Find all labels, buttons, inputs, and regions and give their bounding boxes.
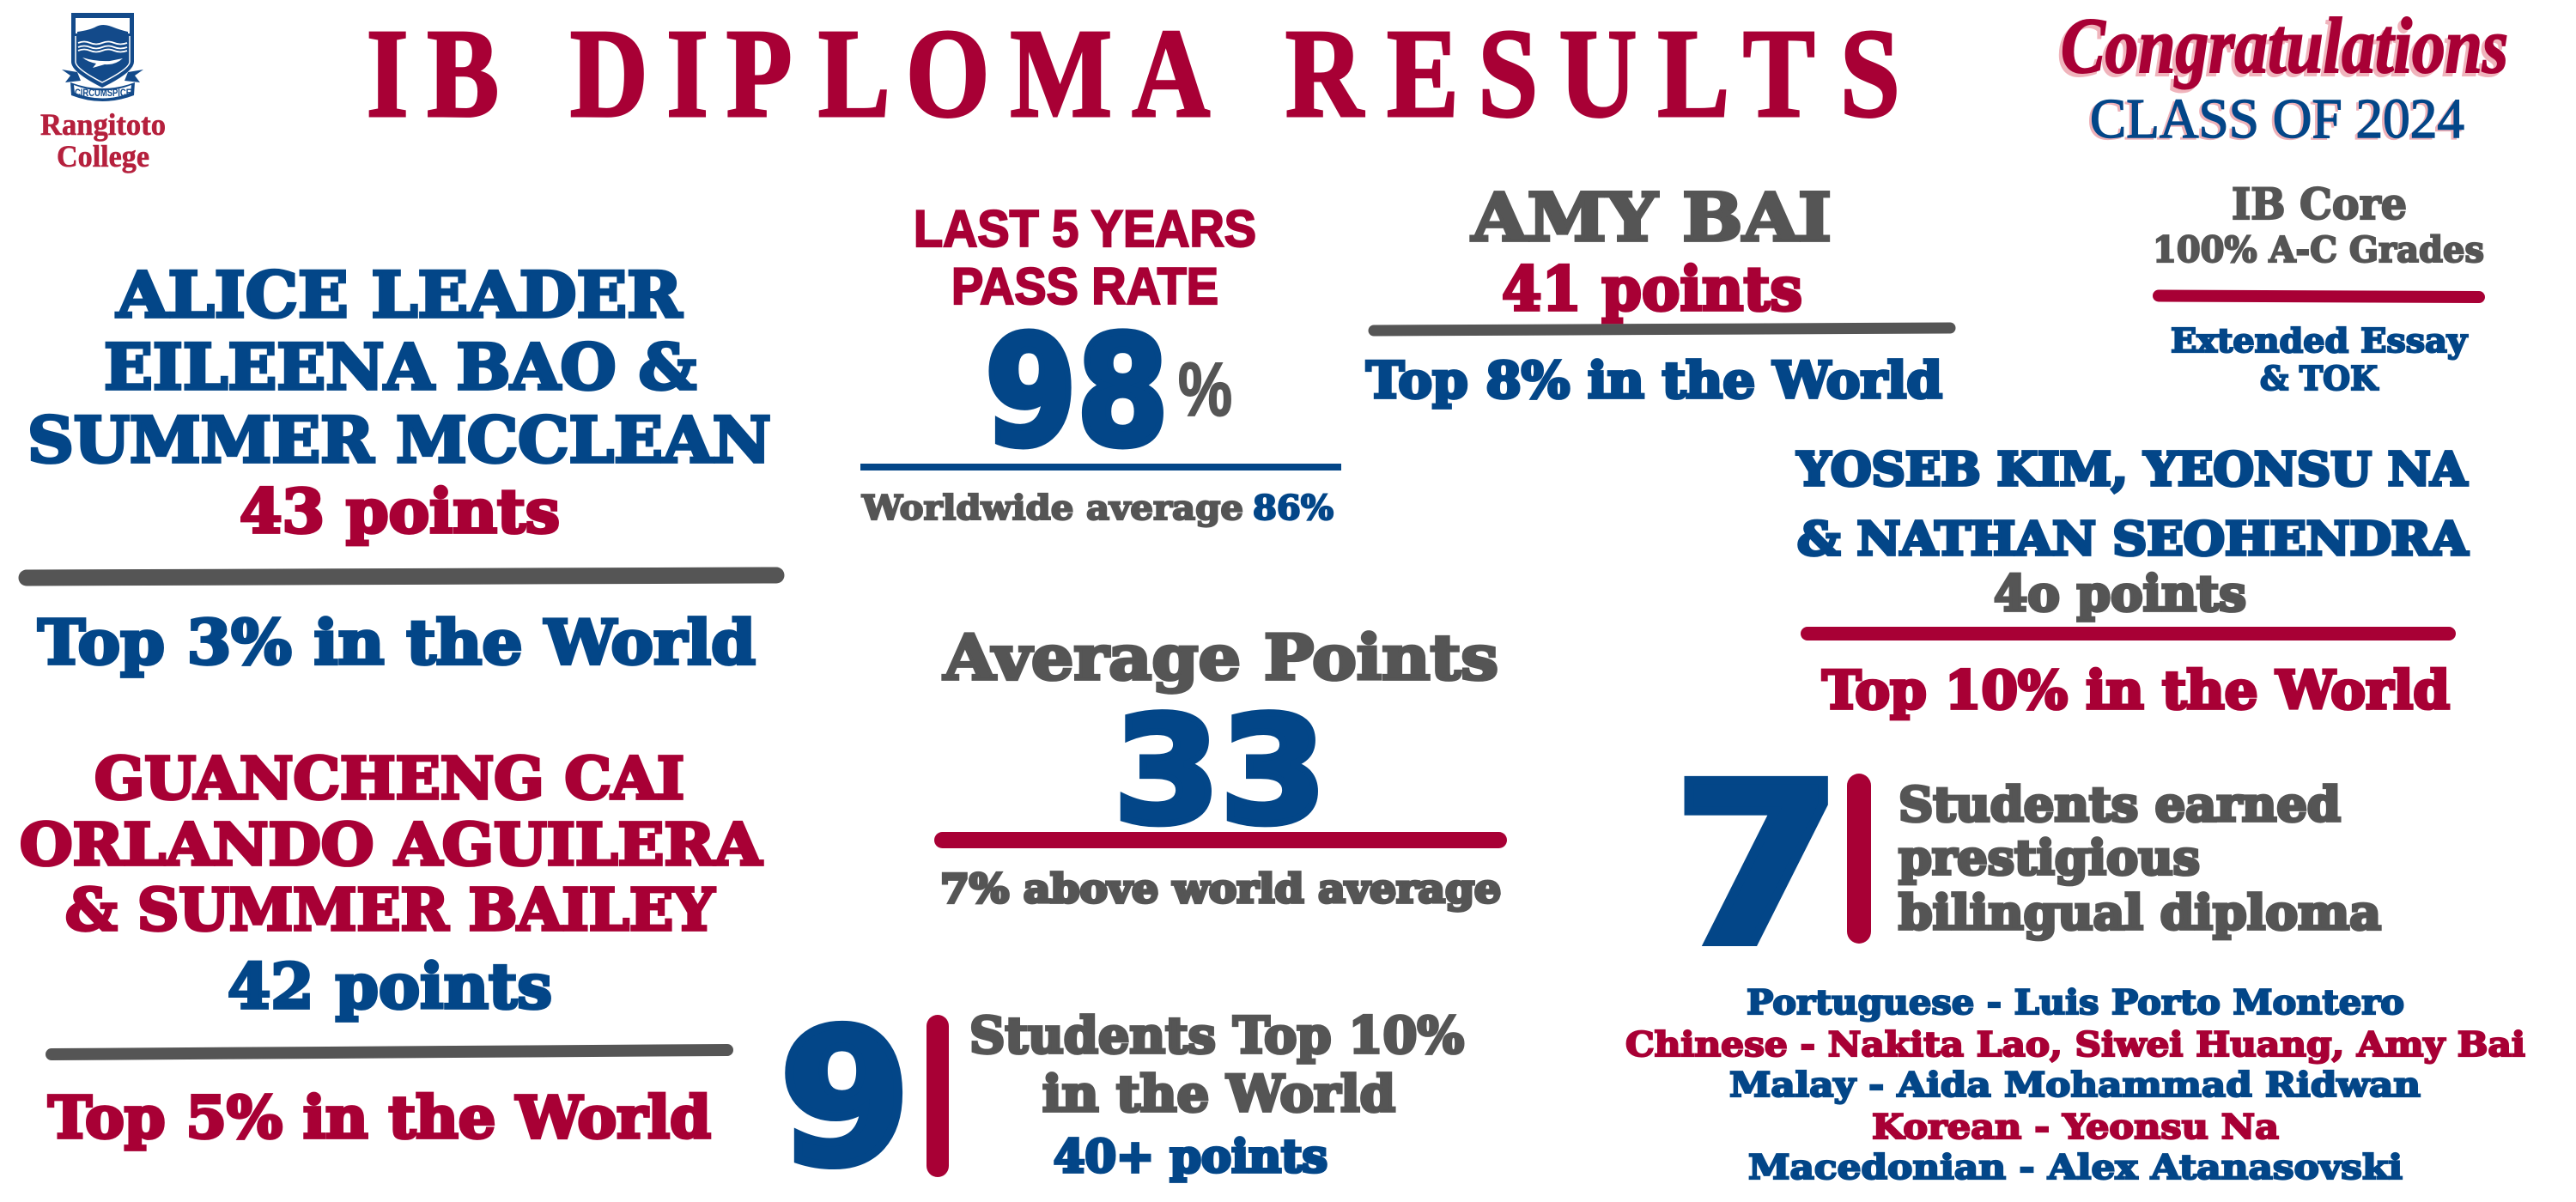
panel: 43 points students (27, 258, 776, 678)
divider (860, 464, 1341, 470)
panel: IB core (2153, 179, 2484, 398)
big number 9: 9 (780, 991, 910, 1202)
big number 7: 7 (1673, 737, 1843, 994)
big number 98: 98 (985, 304, 1169, 480)
language list: Macedonian - Alex Atanasovski (1748, 1148, 2403, 1187)
names: ALICE LEADER (116, 258, 683, 332)
divider (1801, 627, 2456, 640)
names (27, 258, 771, 477)
percent sign: % (1178, 347, 1232, 432)
description: in the World (1042, 1065, 1395, 1123)
divider (52, 1050, 727, 1054)
names: YOSEB KIM, YEONSU NA (1796, 443, 2468, 496)
panel: bilingual diploma (1625, 737, 2525, 1187)
names: EILEENA BAO & (104, 331, 696, 404)
grades: 100% A-C Grades (2153, 229, 2484, 270)
components (2171, 321, 2468, 398)
language list: Malay - Aida Mohammad Ridwan (1729, 1065, 2421, 1105)
panel: Amy Bai (1366, 179, 1950, 410)
description (969, 1006, 1464, 1123)
names (20, 744, 762, 944)
school name (40, 107, 166, 173)
heading: IB Core (2232, 179, 2407, 229)
language list: Portuguese - Luis Porto Montero (1747, 983, 2404, 1023)
icon: school crest: CIRCUMSPICE (75, 87, 131, 99)
worldwide average: Worldwide average (861, 489, 1243, 528)
panel: 40 points students (1796, 443, 2469, 721)
names: SUMMER MCCLEAN (27, 404, 771, 477)
big number 33: 33 (1114, 686, 1327, 857)
comparison: 7% above world average (940, 865, 1501, 912)
points: 41 points (1502, 253, 1802, 325)
names (1796, 443, 2469, 566)
names: ORLANDO AGUILERA (20, 810, 762, 878)
divider (1847, 774, 1871, 944)
heading: PASS RATE (951, 258, 1218, 315)
ranking: Top 5% in the World (48, 1084, 711, 1151)
name: AMY BAI (1471, 179, 1832, 257)
ranking: Top 3% in the World (38, 606, 756, 678)
panel: pass rate (860, 200, 1341, 528)
divider (2159, 295, 2479, 297)
heading: LAST 5 YEARS (914, 200, 1256, 258)
heading (914, 200, 1256, 315)
language list: Korean - Yeonsu Na (1872, 1108, 2279, 1147)
description: Students Top 10% (969, 1006, 1464, 1065)
panel: average points (934, 621, 1507, 912)
points: 40+ points (1054, 1131, 1327, 1183)
class of 2024: CLASS OF 2024 (2090, 88, 2464, 150)
ranking: Top 10% in the World (1822, 660, 2450, 721)
description: bilingual diploma (1899, 884, 2381, 940)
names: GUANCHENG CAI (94, 744, 684, 812)
components: & TOK (2260, 359, 2379, 398)
description: prestigious (1899, 829, 2200, 885)
average value: 86% (1253, 489, 1334, 528)
title: IB DIPLOMA RESULTS (367, 3, 1900, 143)
description (1899, 776, 2381, 940)
logo: Rangitoto College (40, 13, 166, 173)
names: & SUMMER BAILEY (65, 876, 715, 944)
points: 4o points (1994, 565, 2246, 622)
panel: 9 students (780, 991, 1464, 1202)
language list (1625, 983, 2525, 1187)
divider (1374, 328, 1950, 331)
divider (934, 832, 1507, 848)
congratulations script: Congratulations (2057, 5, 2505, 93)
panel: 42 points students (20, 744, 762, 1151)
points: 42 points (228, 950, 552, 1023)
language list: Chinese - Nakita Lao, Siwei Huang, Amy Bai (1625, 1025, 2525, 1065)
divider (927, 1015, 949, 1177)
heading: Average Points (943, 621, 1498, 694)
ranking: Top 8% in the World (1366, 351, 1942, 410)
class of 2024: CLASS OF 2024 (2087, 89, 2462, 152)
school name: Rangitoto (40, 107, 166, 142)
names: & NATHAN SEOHENDRA (1797, 513, 2469, 566)
description: Students earned (1899, 776, 2341, 832)
congratulations badge (2057, 2, 2508, 152)
school name: College (57, 139, 149, 173)
points: 43 points (240, 476, 560, 547)
divider (27, 575, 776, 578)
components: Extended Essay (2171, 321, 2468, 360)
icon: school crest (62, 13, 143, 101)
